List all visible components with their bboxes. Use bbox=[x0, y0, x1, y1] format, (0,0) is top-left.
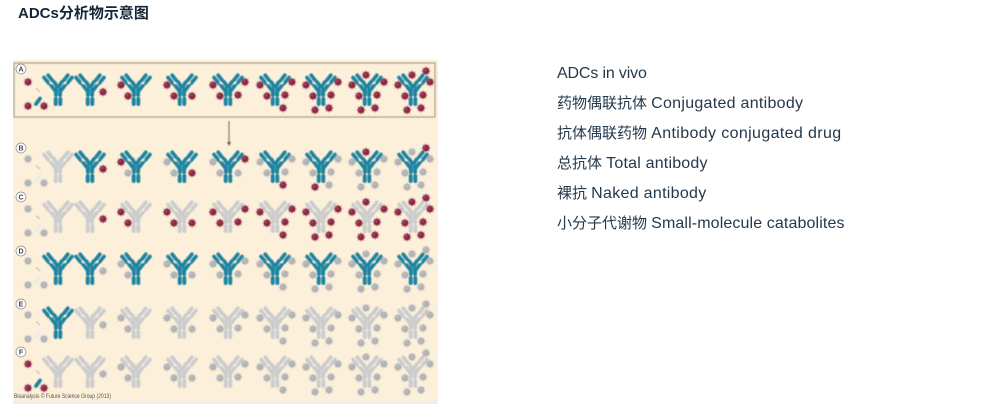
D DAR6 bbox=[301, 254, 343, 294]
C DAR7 bbox=[347, 197, 389, 242]
row C bbox=[23, 193, 435, 242]
item: conjugated antibody: 药物偶联抗体 Conjugated antibody bbox=[557, 95, 803, 112]
D antibody 1 bbox=[44, 254, 72, 283]
F DAR8 bbox=[393, 348, 435, 397]
B DAR8 bbox=[393, 143, 435, 192]
letter D: D bbox=[18, 248, 24, 256]
letter E: E bbox=[19, 302, 24, 308]
D DAR3 bbox=[162, 254, 197, 283]
E DAR6 bbox=[301, 308, 343, 348]
item: antibody conjugated drug: 抗体偶联药物 Antibody conjugated drug bbox=[557, 125, 842, 142]
F free components bbox=[23, 359, 49, 393]
F DAR1 bbox=[76, 357, 108, 386]
letter B bbox=[16, 143, 26, 153]
B antibody 1 bbox=[44, 152, 72, 181]
F DAR5 bbox=[255, 357, 297, 395]
C DAR6 bbox=[301, 202, 343, 242]
A DAR8 bbox=[393, 66, 435, 115]
A DAR2 bbox=[116, 75, 150, 104]
item: total antibody: 总抗体 Total antibody bbox=[557, 155, 708, 172]
E DAR5 bbox=[255, 308, 297, 346]
E free components bbox=[23, 310, 49, 344]
C DAR5 bbox=[255, 202, 297, 240]
panel A frame bbox=[14, 63, 435, 117]
E DAR4 bbox=[208, 308, 250, 337]
E DAR8 bbox=[393, 299, 435, 348]
B DAR7 bbox=[347, 147, 389, 192]
B DAR6 bbox=[301, 152, 343, 192]
F DAR7 bbox=[347, 352, 389, 397]
A DAR6 bbox=[301, 75, 343, 115]
letter F bbox=[16, 347, 26, 357]
letter A bbox=[16, 64, 26, 74]
letter A: A bbox=[18, 66, 24, 74]
B DAR4 bbox=[208, 152, 250, 181]
A DAR4 bbox=[208, 75, 250, 104]
D free components bbox=[23, 256, 49, 290]
C DAR1 bbox=[76, 202, 108, 231]
F DAR4 bbox=[208, 357, 250, 386]
F DAR3 bbox=[162, 357, 197, 386]
B DAR1 bbox=[76, 152, 108, 181]
B DAR3 bbox=[162, 152, 197, 181]
row F bbox=[23, 348, 435, 397]
E DAR3 bbox=[162, 308, 197, 337]
letter F: F bbox=[19, 350, 24, 356]
E antibody 1 bbox=[44, 308, 72, 337]
D DAR1 bbox=[76, 254, 108, 283]
figure background bbox=[13, 60, 438, 404]
A DAR3 bbox=[162, 75, 197, 104]
A DAR7 bbox=[347, 70, 389, 115]
C DAR3 bbox=[162, 202, 197, 231]
A DAR5 bbox=[255, 75, 297, 113]
row E bbox=[23, 299, 435, 348]
F antibody 1 bbox=[44, 357, 72, 386]
item: naked antibody: 裸抗 Naked antibody bbox=[557, 185, 707, 202]
row B bbox=[23, 143, 435, 192]
A antibody 1 bbox=[44, 75, 72, 104]
B DAR2 bbox=[116, 152, 150, 181]
E DAR2 bbox=[116, 308, 150, 337]
E DAR7 bbox=[347, 303, 389, 348]
item: small-molecule catabolites: 小分子代谢物 Small-molecule catabolites bbox=[557, 215, 845, 232]
letter C: C bbox=[18, 194, 24, 202]
D DAR2 bbox=[116, 254, 150, 283]
D DAR7 bbox=[347, 249, 389, 294]
C DAR4 bbox=[208, 202, 250, 231]
text list: analyte names bbox=[557, 65, 845, 232]
letter B: B bbox=[18, 146, 24, 152]
row D bbox=[23, 245, 435, 294]
C DAR8 bbox=[393, 193, 435, 242]
D DAR4 bbox=[208, 254, 250, 283]
E DAR1 bbox=[76, 308, 108, 337]
figure: ADC analytes diagram bbox=[13, 60, 438, 404]
credit line: Bioanalysis © Future Science Group (2013) bbox=[14, 393, 111, 400]
letter D bbox=[16, 246, 26, 256]
item: ADCs in vivo: ADCs in vivo bbox=[557, 65, 647, 82]
C DAR2 bbox=[116, 202, 150, 231]
A DAR1 bbox=[76, 75, 108, 104]
letter E bbox=[16, 299, 26, 309]
F DAR6 bbox=[301, 357, 343, 397]
title: ADCs分析物示意图 bbox=[18, 5, 149, 22]
F DAR2 bbox=[116, 357, 150, 386]
B free components bbox=[23, 154, 49, 188]
C antibody 1 bbox=[44, 202, 72, 231]
letter C bbox=[16, 192, 26, 202]
row A bbox=[23, 66, 435, 115]
A free components bbox=[23, 77, 49, 111]
B DAR5 bbox=[255, 152, 297, 190]
D DAR8 bbox=[393, 245, 435, 294]
C free components bbox=[23, 204, 49, 238]
D DAR5 bbox=[255, 254, 297, 292]
arrow bbox=[227, 121, 231, 146]
panel letters bbox=[16, 64, 26, 357]
